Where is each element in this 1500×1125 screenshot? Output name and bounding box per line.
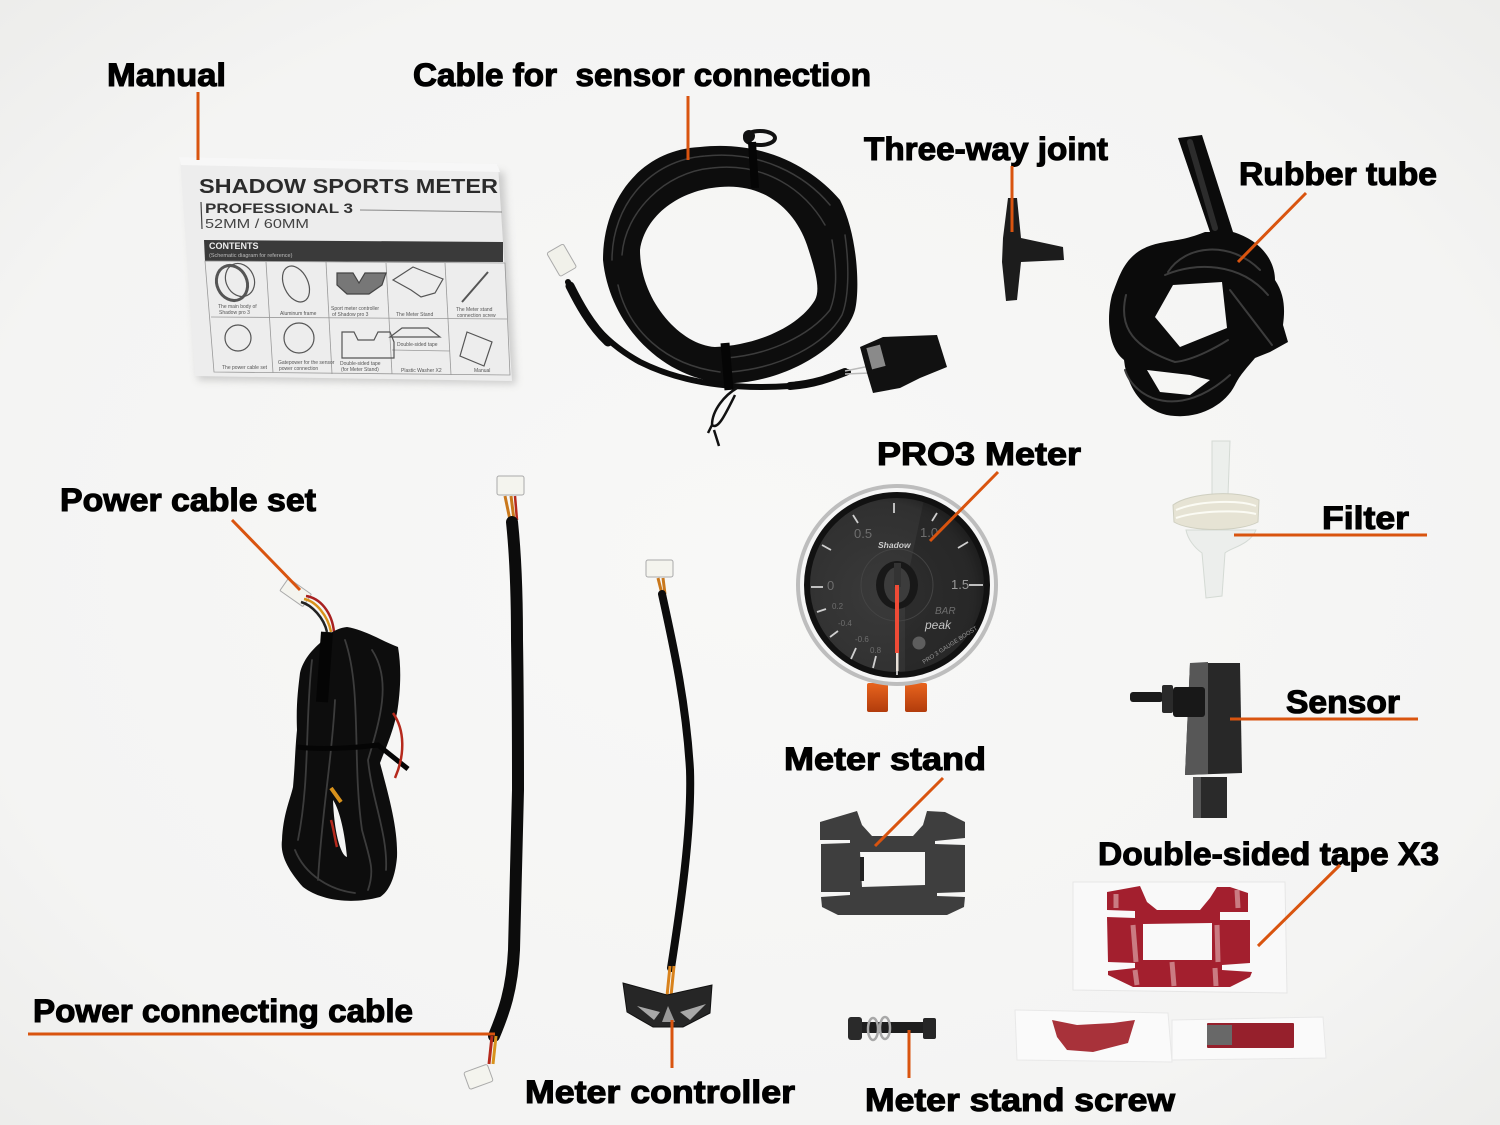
manual captions: of Shadow pro 3: [332, 312, 369, 318]
manual contents grid: [205, 261, 510, 375]
label: Power cable set: Power cable set: [60, 482, 316, 518]
bottom cable tie: [708, 343, 737, 446]
tape shape: [1107, 886, 1252, 987]
manual captions: Sport meter controller: [331, 306, 379, 312]
label: Filter: Filter: [1322, 500, 1409, 536]
plug: [646, 560, 673, 577]
label: PRO3 Meter: PRO3 Meter: [877, 436, 1081, 472]
icon: filter: [1173, 441, 1259, 598]
top plug: [497, 476, 524, 495]
cable: sensor connection: [547, 130, 947, 446]
contents bar: [204, 240, 503, 262]
manual size text: 52MM / 60MM: [205, 216, 309, 231]
orange brackets: [867, 683, 888, 712]
bottom plug: [464, 1064, 493, 1090]
peak button: [912, 636, 926, 650]
sensor connector: [1193, 777, 1227, 818]
dial numbers: 0: [827, 578, 834, 593]
controller body: [623, 983, 712, 1027]
manual captions: power connection: [279, 366, 318, 372]
label: Manual: Manual: [107, 57, 226, 93]
dial numbers: 0.5: [854, 526, 872, 541]
manual pictograms: [211, 259, 492, 366]
small tape strip: [1207, 1023, 1294, 1048]
sensor nipple: [1130, 692, 1163, 702]
dial numbers: [827, 525, 969, 655]
manual captions: The Meter Stand: [396, 312, 433, 318]
cable: power connecting cable: [464, 476, 524, 1090]
manual captions: The power cable set: [222, 365, 268, 371]
icon: PRO3 meter: [796, 484, 1000, 712]
icon: three-way joint: [1002, 198, 1064, 301]
dial numbers: peak: [924, 618, 952, 632]
ticks: [811, 503, 983, 675]
label: Meter stand screw: Meter stand screw: [865, 1082, 1175, 1118]
panel: manual: (Schematic diagram for reference): [209, 253, 293, 259]
label: Double-sided tape X3: Double-sided tape X3: [1098, 836, 1439, 872]
manual captions: Double-sided tape: [397, 342, 438, 348]
manual captions: Aluminum frame: [280, 311, 317, 317]
colored wires: [306, 596, 334, 632]
manual captions: connection screw: [457, 313, 496, 319]
dial numbers: 1.0: [920, 525, 938, 540]
manual captions: (for Meter Stand): [341, 367, 379, 373]
manual title: SHADOW SPORTS METER: [199, 176, 499, 198]
label: Meter controller: Meter controller: [525, 1074, 795, 1110]
white plug: [547, 244, 577, 277]
hub: [876, 561, 918, 609]
label: Meter stand: Meter stand: [784, 741, 986, 777]
manual subtitle: PROFESSIONAL 3: [205, 200, 353, 216]
label: Cable for sensor connection: Cable for sensor connection: [413, 57, 871, 93]
manual captions: Double-sided tape: [340, 361, 381, 367]
dial numbers: 1.5: [951, 577, 969, 592]
manual captions: The Meter stand: [456, 307, 493, 313]
panel: manual: [179, 157, 516, 384]
manual captions: Manual: [474, 368, 490, 374]
label: Rubber tube: Rubber tube: [1239, 156, 1437, 192]
tape backing paper: [1073, 882, 1287, 993]
zip tie: [297, 745, 408, 769]
heat shrink: [322, 632, 327, 702]
dial numbers: -0.6: [855, 635, 869, 644]
manual captions: Plastic Washer X2: [401, 368, 442, 374]
dial numbers: -0.4: [838, 619, 852, 628]
label: Power connecting cable: Power connecting cable: [33, 993, 413, 1029]
dial face: [805, 493, 989, 677]
icon: meter stand screw: [848, 1017, 936, 1040]
needle: [894, 563, 901, 587]
black plug: [860, 335, 947, 393]
icon: sensor: [1130, 662, 1242, 818]
red wires: [393, 713, 402, 778]
top cable tie: [743, 130, 775, 188]
sensor cable tail: [568, 282, 848, 387]
panel: manual: CONTENTS: [209, 241, 258, 251]
brand: Shadow: [878, 540, 912, 550]
cable: power cable set: [280, 578, 408, 901]
cable coil: [603, 146, 857, 383]
small tape curved: [1052, 1020, 1135, 1052]
gauge caption: PRO 3 GAUGE BOOST: [922, 626, 979, 666]
dial numbers: BAR: [935, 606, 956, 617]
white plug: [280, 578, 311, 607]
small tape papers: [1015, 1010, 1172, 1062]
bezel: [796, 484, 998, 686]
manual captions: The main body of: [218, 304, 257, 310]
icon: meter stand: [820, 811, 965, 915]
manual captions: Shadow pro 3: [219, 310, 250, 316]
label: Sensor: Sensor: [1286, 684, 1400, 720]
manual captions: Gatepower for the sensor: [278, 360, 335, 366]
cable coil: [282, 627, 400, 901]
cable: meter controller cable: [623, 560, 712, 1027]
label: Three-way joint: Three-way joint: [864, 131, 1108, 167]
dial numbers: 0.2: [832, 602, 844, 611]
icon: rubber tube: [1109, 135, 1288, 416]
icon: double-sided tape: [1015, 882, 1326, 1062]
sensor housing: [1185, 663, 1242, 775]
manual captions: [218, 304, 496, 374]
dial numbers: 0.8: [870, 646, 882, 655]
